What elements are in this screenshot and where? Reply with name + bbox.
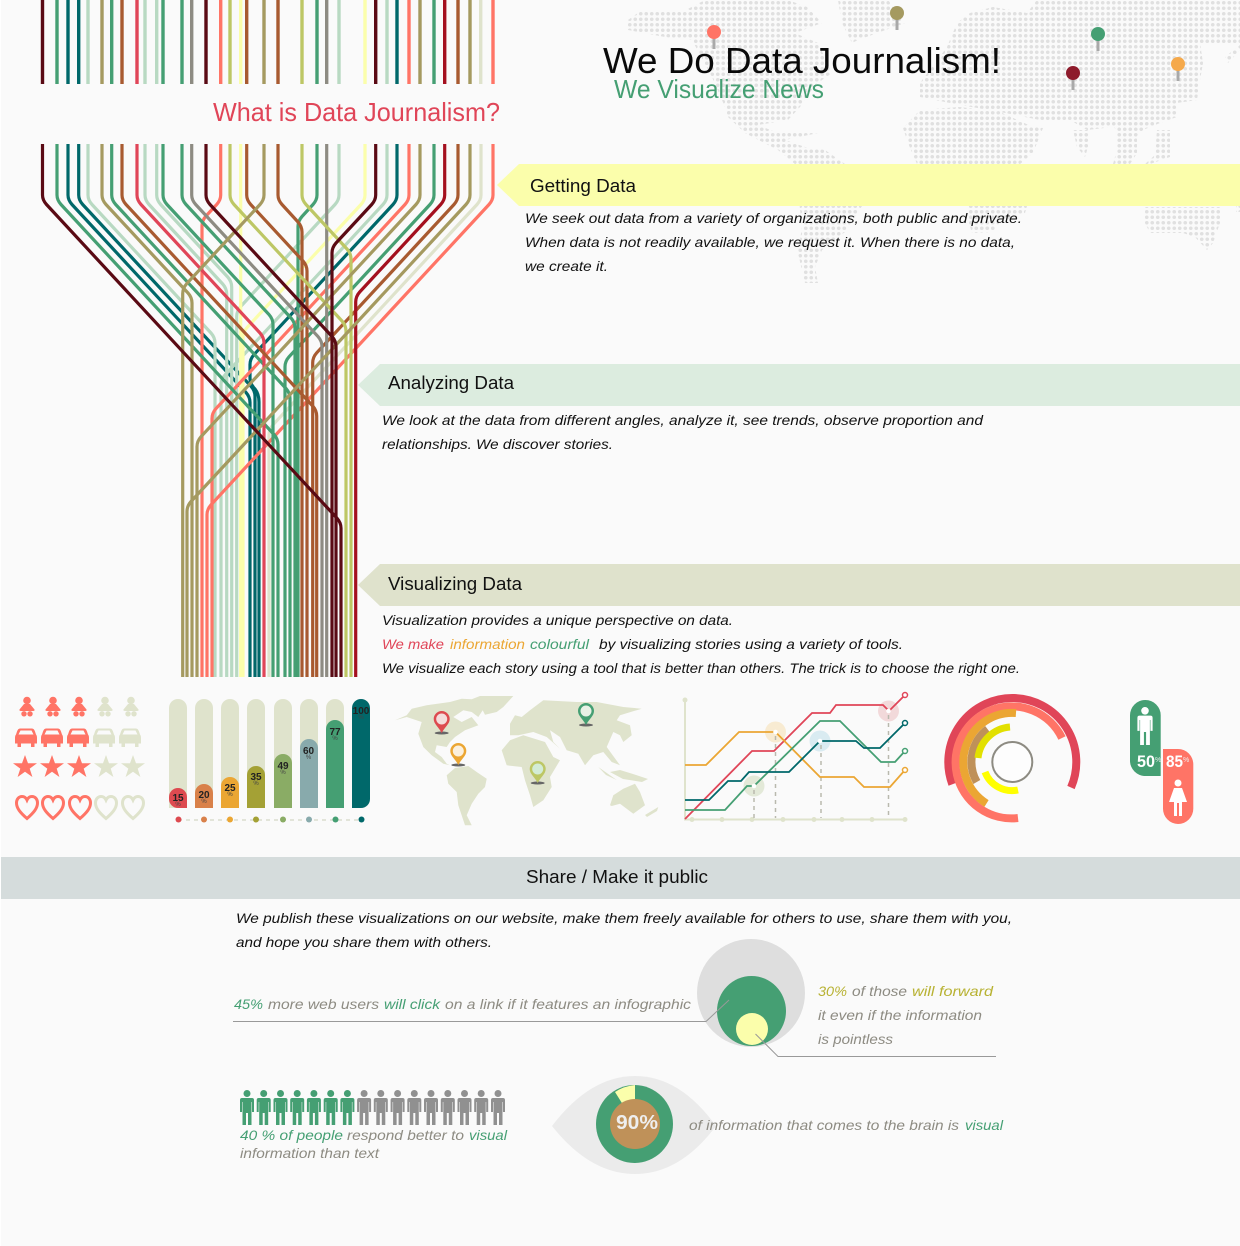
panel: getting data: We seek out data from a variety of organizations, both public and private.: [525, 210, 1022, 226]
subtitle: We Visualize News: [614, 74, 824, 104]
panel: visualizing data: information: [450, 636, 525, 652]
text: 30% will forward: will forward: [912, 983, 994, 999]
panel: visualizing data: [358, 564, 1240, 676]
top line stubs: [42, 0, 493, 84]
bar chart: %: [175, 802, 181, 808]
funnel of coloured data lines: [42, 144, 493, 677]
panel: analyzing data: We look at the data from different angles, analyze it, see trends, observe proportion and: [382, 412, 984, 428]
gender ratio cards: %: [1183, 757, 1189, 764]
radial chart: [948, 698, 1076, 818]
panel: visualizing data: Visualizing Data: [388, 574, 523, 594]
heading: what is data journalism: What is Data Journalism?: [213, 97, 500, 127]
text: of information visual: visual: [965, 1117, 1004, 1133]
text: 30% will forward: it even if the information: [818, 1007, 982, 1023]
bar chart: 35: [250, 772, 262, 783]
panel: getting data: When data is not readily available, we request it. When there is no data,: [525, 234, 1015, 250]
bar chart: 77: [329, 727, 341, 738]
panel: visualizing data: Visualization provides a unique perspective on data.: [382, 612, 733, 628]
bar chart: %: [332, 736, 338, 742]
text: 30% will forward: [818, 983, 994, 1047]
text: of information visual: of information that comes to the brain is: [689, 1117, 959, 1133]
eye chart: 90%: [552, 1076, 716, 1174]
bar chart: 100: [353, 706, 370, 717]
map pins: [707, 6, 1185, 90]
text: 45% more clicks: on a link if it features an infographic: [445, 996, 691, 1012]
gender ratio cards: 50: [1137, 752, 1155, 771]
bar chart: 60: [303, 746, 314, 757]
bar chart: 15: [172, 793, 184, 804]
text: 30% will forward: of those: [852, 983, 907, 999]
text: 45% more clicks: [234, 996, 691, 1012]
text: 45% more clicks: more web users: [268, 996, 379, 1012]
panel: share band: Share / Make it public: [526, 867, 708, 887]
world map with pins: [395, 696, 658, 825]
pictogram: row of people: [240, 1090, 505, 1125]
panel: visualizing data: by visualizing stories using a variety of tools.: [599, 636, 903, 652]
panel: visualizing data: We make: [382, 636, 444, 652]
panel: analyzing data: [358, 364, 1240, 452]
dotted world map background: [625, 0, 1240, 290]
nested circles statistic: [233, 939, 996, 1056]
panel: getting data: [497, 164, 1240, 274]
bar chart: [169, 699, 370, 822]
text: 40% of people: visual: [469, 1127, 508, 1143]
text block: share description: [236, 910, 1012, 950]
text: 30% will forward: is pointless: [818, 1031, 893, 1047]
bar chart: %: [306, 755, 312, 761]
text: 30% will forward: 30%: [818, 983, 847, 999]
text block: share description: We publish these visualizations on our website, make them freely available for others to use, share them with you,: [236, 910, 1012, 926]
panel: analyzing data: relationships. We discover stories.: [382, 436, 613, 452]
bar chart: 49: [277, 761, 289, 772]
text: 45% more clicks: 45%: [234, 996, 263, 1012]
bar chart: %: [280, 770, 286, 776]
bar chart: %: [358, 715, 364, 721]
text block: share description: and hope you share them with others.: [236, 934, 492, 950]
bar chart: 20: [198, 790, 210, 801]
title: We Do Data Journalism!: [603, 40, 1001, 81]
gender ratio cards: [1130, 700, 1193, 824]
panel: visualizing data: colourful: [530, 636, 590, 652]
text: 40% of people: information than text: [240, 1145, 380, 1161]
bar chart: %: [253, 781, 259, 787]
text: 45% more clicks: will click: [384, 996, 441, 1012]
gender ratio cards: %: [1155, 757, 1161, 764]
text: 40% of people: 40 % of people: [240, 1127, 343, 1143]
text: 40% of people: [240, 1127, 508, 1161]
bar chart: %: [201, 799, 207, 805]
eye chart: 90%: 90%: [616, 1112, 658, 1134]
icon: pictogram array: [13, 697, 145, 818]
panel: getting data: Getting Data: [530, 176, 637, 196]
panel: analyzing data: Analyzing Data: [388, 373, 515, 393]
text: 40% of people: respond better to: [347, 1127, 464, 1143]
bar chart: %: [227, 792, 233, 798]
bar chart: 25: [224, 783, 236, 794]
panel: visualizing data: We visualize each story using a tool that is better than others. The trick is to choose the right one.: [382, 660, 1020, 676]
panel: share band: [1, 857, 1240, 899]
panel: getting data: we create it.: [525, 258, 608, 274]
line chart: [682, 692, 908, 822]
gender ratio cards: 85: [1166, 752, 1183, 771]
